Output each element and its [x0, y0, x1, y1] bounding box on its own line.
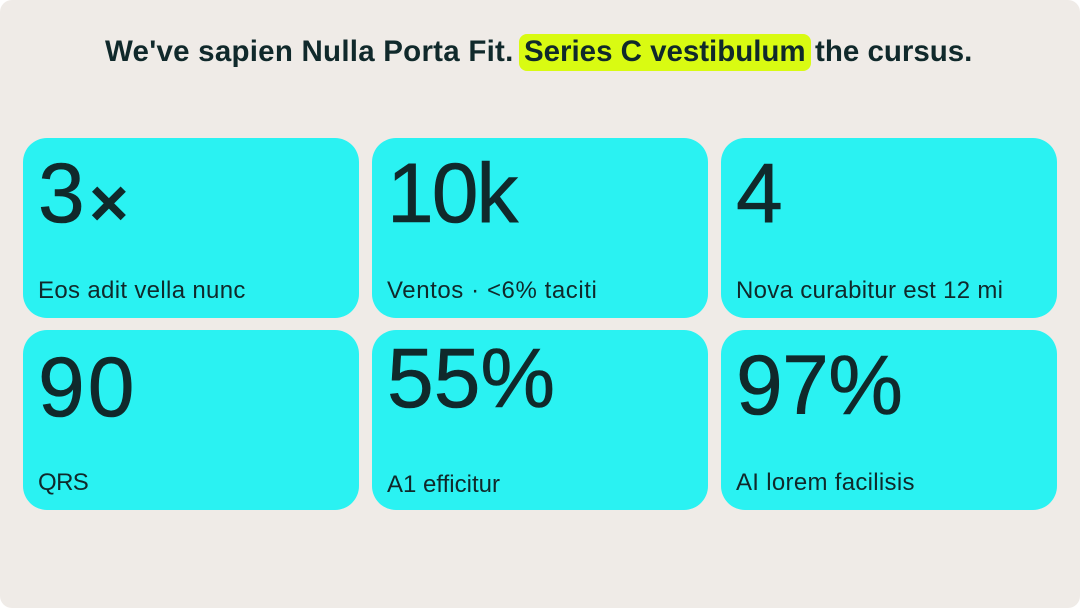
card: 90: 90 — [38, 340, 137, 434]
card: 55%: A1 efficitur — [387, 471, 500, 498]
card: 90 — [23, 330, 359, 510]
card: 10k: 10k — [387, 146, 516, 240]
card: 3x: × — [89, 165, 129, 241]
card: 10k: Ventos · <6% taciti — [387, 277, 597, 304]
title — [105, 34, 972, 71]
card: 97%: 97% — [736, 338, 902, 432]
card: 10k — [372, 138, 708, 318]
card: 4: 4 — [736, 146, 783, 240]
card: 4 — [721, 138, 1057, 318]
card: 90: QRS — [38, 469, 88, 496]
card: 55%: 55% — [387, 331, 555, 425]
title: the cursus. — [815, 35, 972, 68]
card: 97% — [721, 330, 1057, 510]
title: Series C vestibulum — [524, 35, 806, 68]
card: 97%: AI lorem facilisis — [736, 469, 915, 496]
card: 55% — [372, 330, 708, 510]
title: We've sapien Nulla Porta Fit. — [105, 35, 514, 68]
card: 3x: 3 — [38, 146, 85, 240]
card: 4: Nova curabitur est 12 mi — [736, 277, 1003, 304]
card: 3x: Eos adit vella nunc — [38, 277, 246, 304]
card: 3x — [23, 138, 359, 318]
